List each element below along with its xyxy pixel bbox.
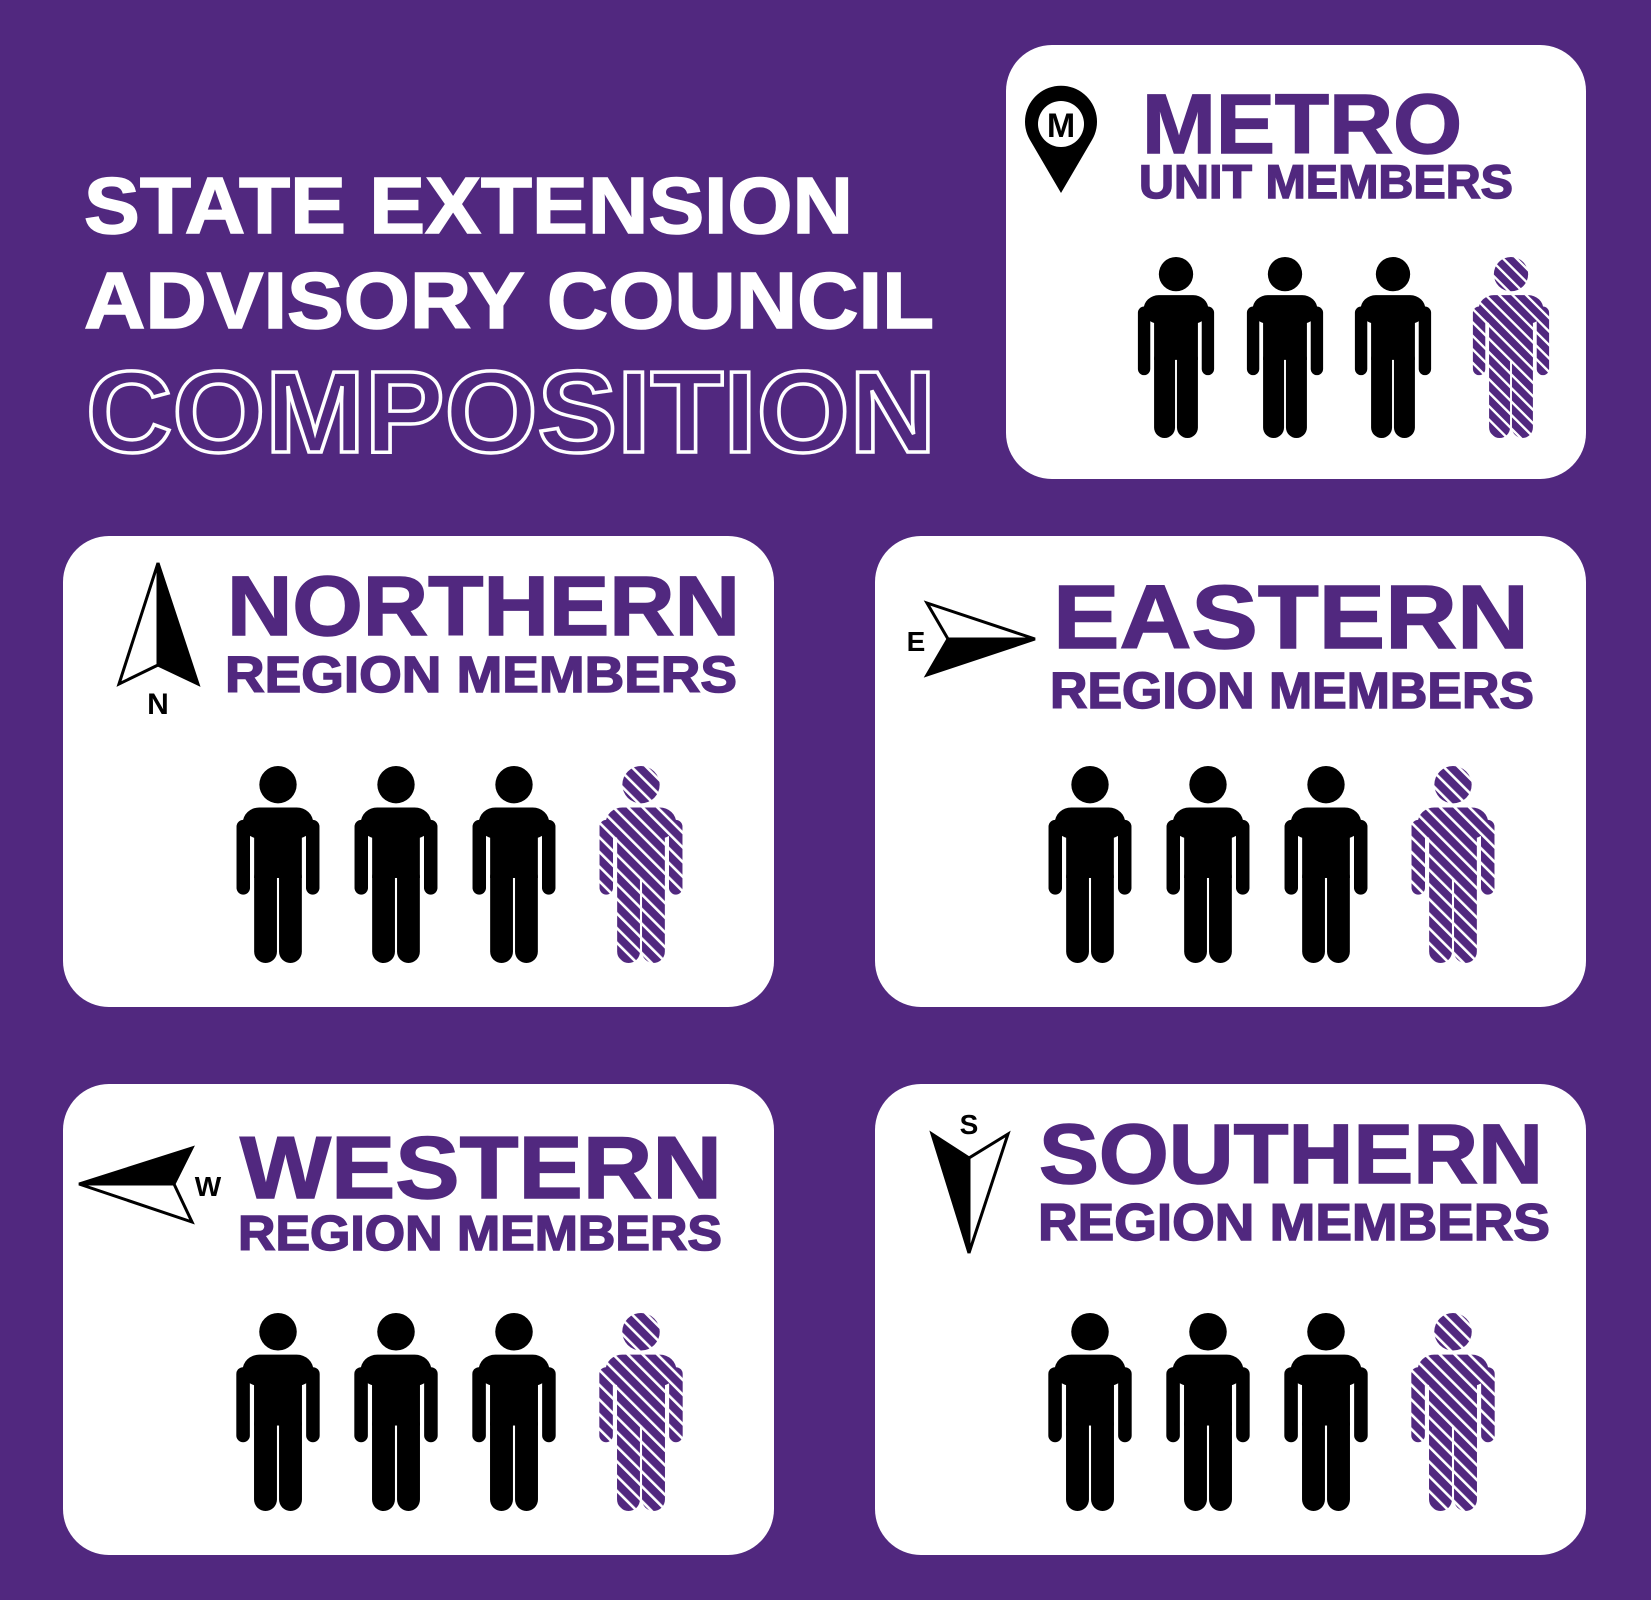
panel: southern: REGION MEMBERS [1038,1194,1550,1252]
title: STATE EXTENSION [84,161,853,250]
title: COMPOSITION [86,347,936,477]
icon: south arrow: S [960,1109,978,1140]
panel: northern [63,536,774,1007]
icon: west arrow [79,1148,222,1222]
people: western [236,1313,683,1511]
people: eastern [1049,766,1494,963]
people: southern [1048,1313,1495,1511]
icon: north arrow: N [147,688,169,721]
icon: east arrow [907,603,1035,675]
panel: eastern: REGION MEMBERS [1050,662,1534,719]
heading: metro: METRO [1142,77,1462,171]
title [84,161,936,477]
panel: eastern [875,536,1586,1007]
panel: western [63,1084,774,1555]
icon: north arrow [119,563,198,721]
heading: eastern: EASTERN [1053,568,1529,668]
title: ADVISORY COUNCIL [84,256,934,345]
people: metro [1138,257,1549,438]
heading: northern: NORTHERN [227,559,740,653]
panel: metro: UNIT MEMBERS [1139,155,1513,208]
icon: map pin M: M [1047,107,1075,145]
icon: map pin M [1025,86,1097,193]
icon: east arrow: E [907,626,925,657]
heading: southern: SOUTHERN [1039,1107,1543,1201]
heading: western: WESTERN [240,1118,722,1217]
panel: southern [875,1084,1586,1555]
panel: metro [1006,45,1586,479]
icon: south arrow [932,1109,1008,1253]
people: northern [237,766,682,963]
icon: west arrow: W [195,1171,222,1202]
panel: western: REGION MEMBERS [238,1207,722,1261]
panel: northern: REGION MEMBERS [225,646,737,703]
